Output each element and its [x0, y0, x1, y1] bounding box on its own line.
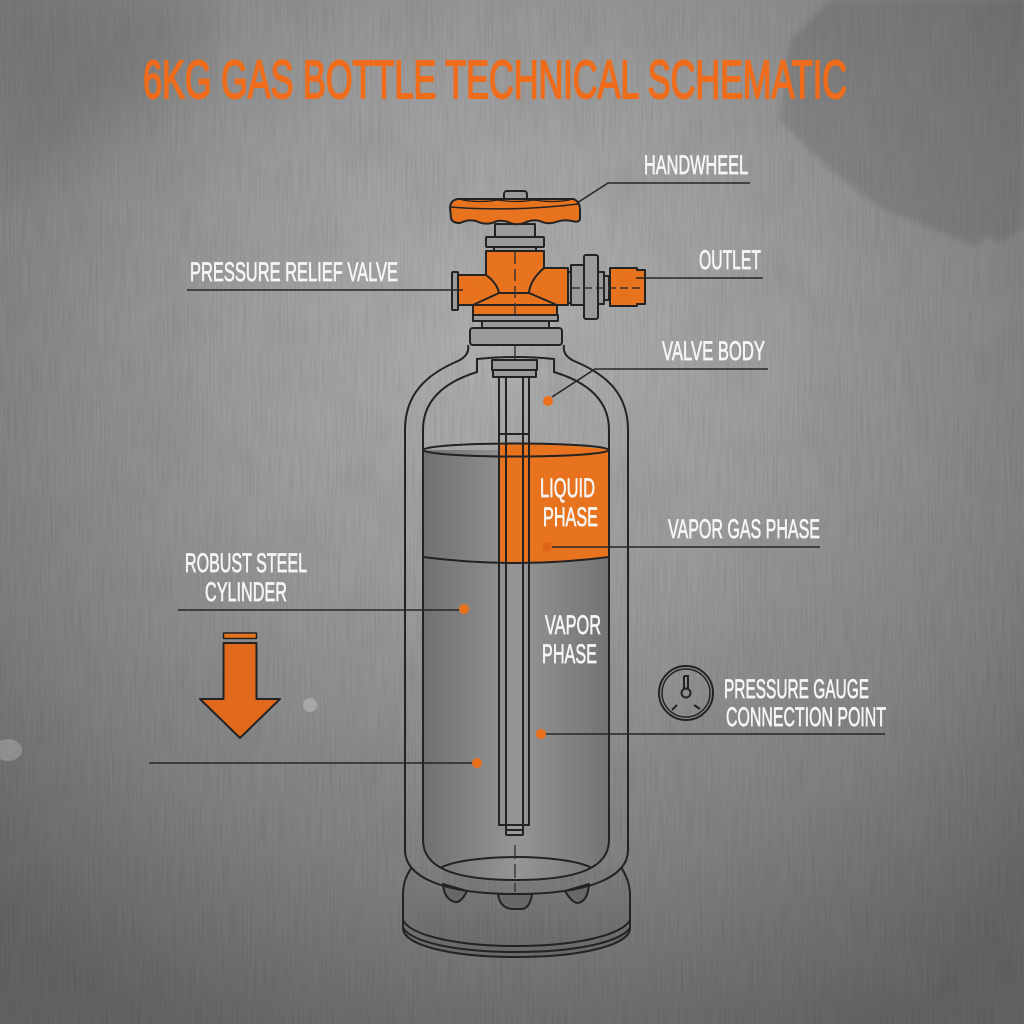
label: pressure gauge connection point: CONNECTION POINT [726, 702, 886, 732]
cylinder outer wall [405, 345, 628, 894]
label: outlet [625, 245, 763, 282]
label: robust steel cylinder [178, 548, 469, 614]
label: outlet: OUTLET [699, 245, 761, 275]
pressure relief flange [452, 272, 458, 310]
label: valve body [543, 336, 768, 406]
valve assembly [450, 191, 645, 328]
label: pressure gauge connection point: PRESSURE GAUGE [724, 674, 869, 704]
handwheel cap [504, 191, 527, 201]
outlet connector [568, 255, 645, 319]
lower cavity tint [423, 450, 609, 880]
leader line: lower cylinder [149, 758, 482, 768]
label: pressure gauge connection point [536, 674, 886, 739]
label: vapor gas phase: VAPOR GAS PHASE [668, 514, 820, 544]
label: handwheel [577, 150, 750, 203]
valve body contours [473, 268, 557, 305]
valve body [458, 251, 568, 315]
phase boundary line [423, 557, 609, 563]
liquid level surface [423, 444, 609, 456]
base feet [443, 884, 589, 909]
cavity floor ellipse [440, 857, 592, 868]
handwheel [450, 199, 580, 224]
stem and flange [486, 224, 544, 252]
label: vapor gas phase [542, 514, 820, 552]
cylinder inner cavity [423, 357, 609, 880]
label: robust steel cylinder: CYLINDER [205, 577, 287, 607]
internal valve seat [492, 360, 537, 377]
label: vapor phase: PHASE [542, 639, 597, 669]
body centre line [514, 252, 516, 314]
label: liquid phase [540, 473, 598, 532]
centre line [514, 345, 516, 892]
gas bottle schematic [403, 191, 645, 957]
label: handwheel: HANDWHEEL [644, 150, 748, 180]
label: valve body: VALVE BODY [662, 336, 765, 366]
label: robust steel cylinder: ROBUST STEEL [185, 548, 307, 578]
icon: pressure gauge [659, 666, 713, 720]
label: pressure relief valve [187, 257, 476, 295]
label: pressure relief valve: PRESSURE RELIEF VALVE [190, 257, 398, 287]
dip tube [499, 378, 529, 835]
base skirt [403, 867, 630, 957]
icon: down arrow [200, 633, 280, 738]
label: liquid phase: LIQUID [540, 473, 595, 503]
label: vapor phase: VAPOR [545, 610, 601, 640]
liquid phase orange fill [500, 444, 609, 563]
label: vapor phase [542, 610, 601, 669]
lower plates [473, 315, 558, 328]
label: liquid phase: PHASE [543, 502, 598, 532]
neck collar [470, 328, 562, 345]
